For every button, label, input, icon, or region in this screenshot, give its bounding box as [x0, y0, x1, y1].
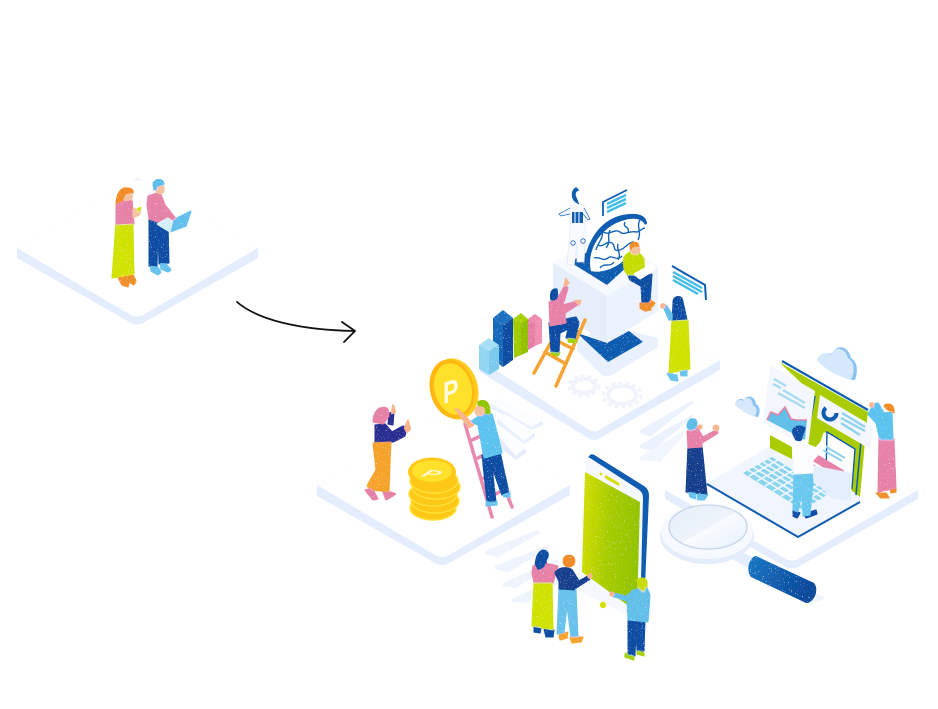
figure: woman with phone: [112, 188, 141, 287]
card: donut chart: [817, 395, 874, 449]
column: navy: [493, 310, 513, 367]
panel: brain platform: [480, 290, 720, 440]
cube top: [553, 232, 658, 296]
cube left face: [553, 263, 607, 343]
speech bubble: woman: [672, 266, 706, 300]
ladder: pink: [465, 420, 512, 517]
icon: smartphone: [578, 454, 649, 622]
figure: man holding coin: [455, 401, 510, 506]
brain tower: [553, 232, 658, 376]
figure: man with laptop: [147, 180, 191, 275]
bar chart: isometric columns: [479, 310, 542, 375]
magnifier handle: [748, 556, 818, 605]
panel: coin platform: [317, 412, 570, 565]
stepping slabs between platforms: [485, 398, 693, 603]
figure: woman in headscarf: [686, 419, 719, 500]
ladder: orange: [534, 320, 585, 386]
icon: brain: [585, 214, 647, 272]
column: lime: [513, 313, 528, 358]
screen frame: [779, 362, 868, 497]
laptop: [707, 361, 874, 537]
figure: man in white: [793, 426, 826, 518]
folder box: [812, 432, 855, 500]
navy base: [577, 331, 643, 362]
column: pink: [528, 314, 542, 350]
figure: seated person with laptop: [623, 242, 655, 311]
figure: woman with orange skirt: [365, 405, 410, 500]
panel: left platform: [17, 178, 258, 324]
figure: climber: [549, 280, 580, 356]
cube right face: [607, 267, 658, 343]
figure: robot: [559, 188, 590, 266]
coin letter: P: [416, 468, 447, 480]
phone camera: [600, 473, 602, 475]
phone button: [600, 602, 606, 608]
laptop base: [707, 445, 860, 537]
figure: woman with lime skirt: [661, 296, 690, 381]
lime panel: [770, 435, 792, 459]
figure: man in blue at phone: [610, 578, 650, 660]
icon: big coin: [423, 353, 485, 425]
icon: large cloud: [817, 347, 857, 380]
card: line chart: [763, 365, 815, 447]
icon: gears: [569, 376, 641, 407]
lower slab: [577, 325, 658, 376]
speech bubble: robot: [603, 190, 628, 216]
figure: woman in pink trousers: [868, 403, 896, 498]
icon: magnifying glass: [660, 505, 825, 605]
panel: laptop platform: [665, 418, 918, 568]
arrow: [237, 302, 355, 342]
figure: woman at phone: [532, 550, 558, 637]
figure: man at phone: [555, 555, 592, 643]
navy top plate: [570, 245, 630, 285]
column: light blue: [479, 338, 499, 375]
coin letter: P: [443, 372, 459, 411]
icon: small cloud: [735, 397, 760, 417]
icon: coin stack: [408, 458, 460, 520]
phone speaker: [606, 477, 618, 484]
keyboard: [743, 457, 830, 510]
phone screen: [582, 472, 640, 612]
